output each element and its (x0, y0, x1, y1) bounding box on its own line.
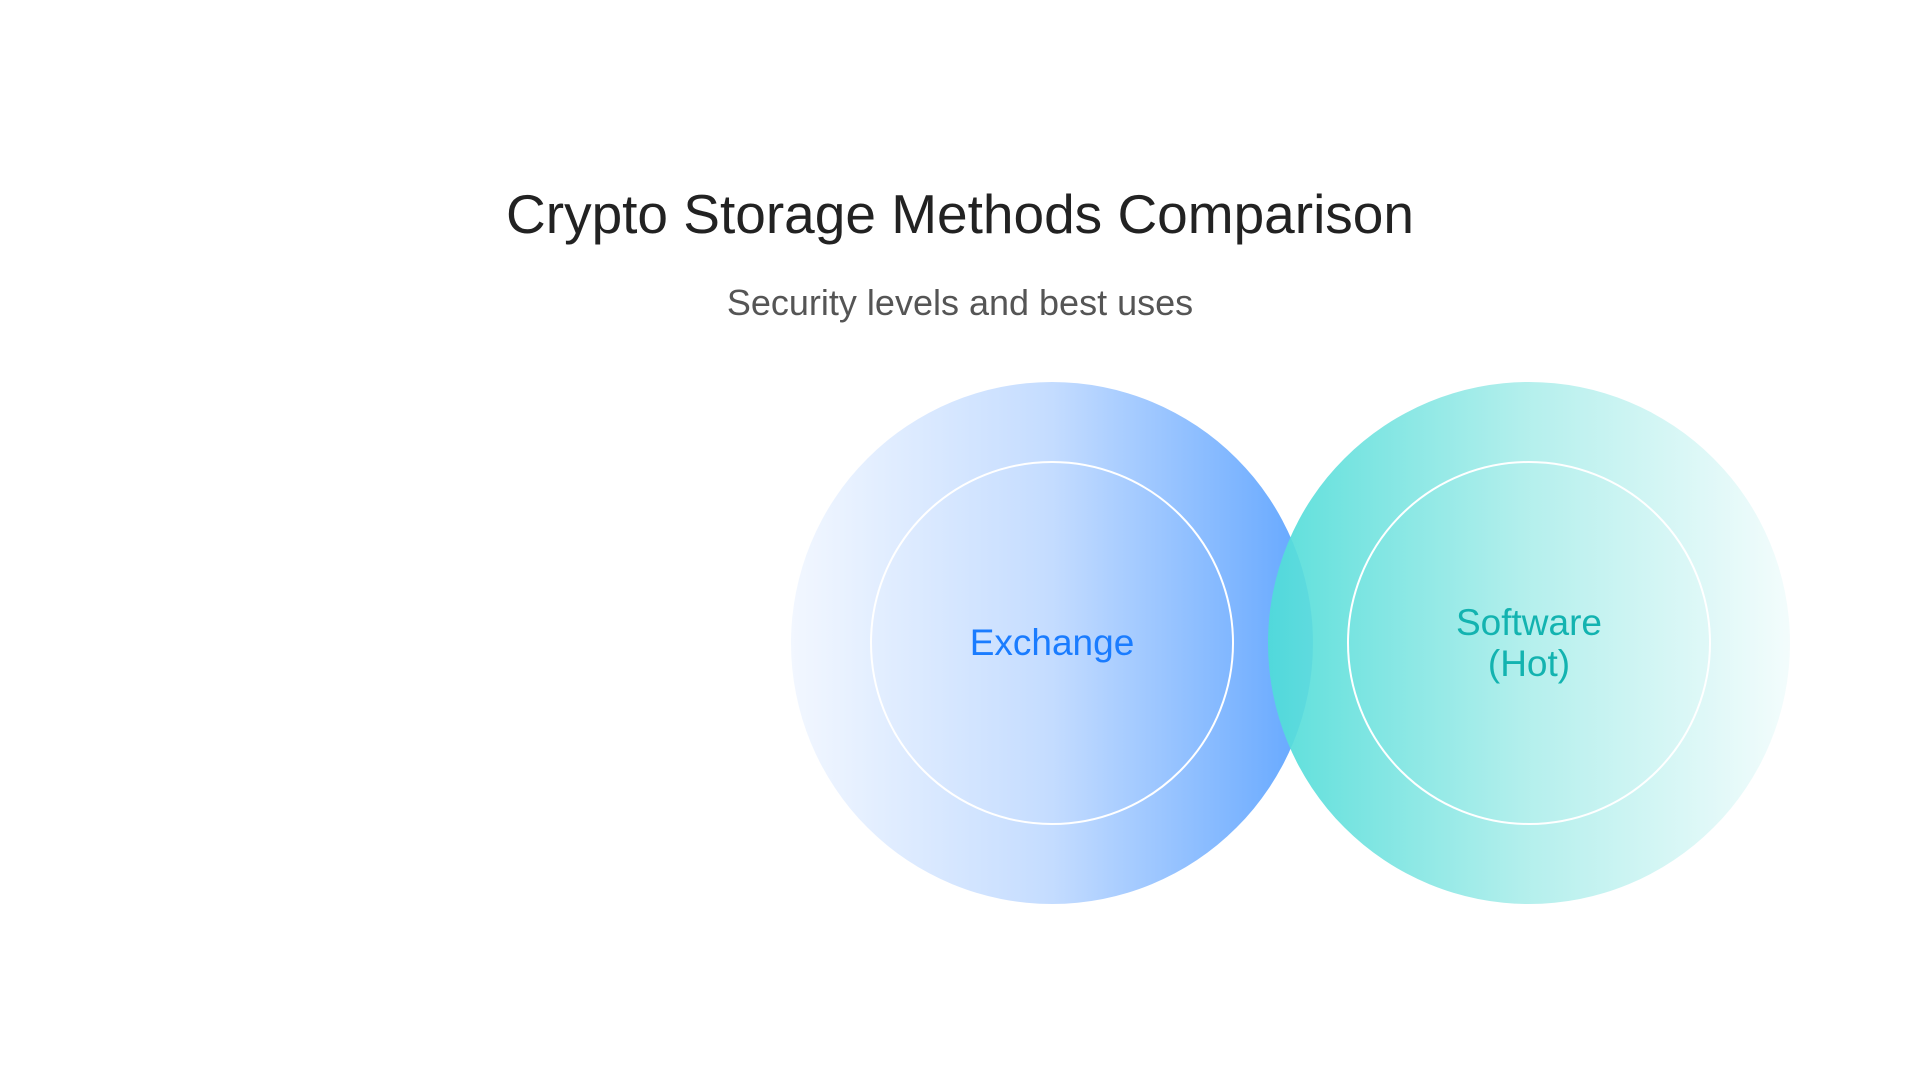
circle: exchange: Exchange (970, 622, 1134, 663)
circle: exchange (791, 382, 1313, 904)
circle: software hot: (Hot) (1488, 643, 1570, 684)
title: Crypto Storage Methods Comparison (506, 183, 1414, 245)
circle: software hot (1268, 382, 1790, 904)
circle: software hot: Software (1456, 602, 1602, 643)
subtitle: Security levels and best uses (727, 282, 1193, 323)
